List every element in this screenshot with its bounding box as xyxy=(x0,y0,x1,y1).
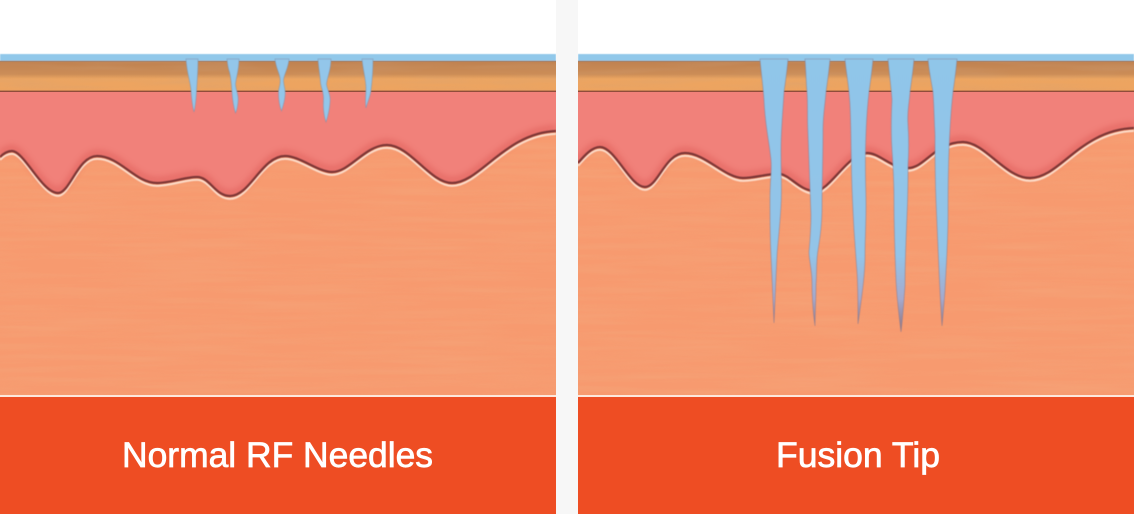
caption bar: Fusion Tip xyxy=(578,395,1134,514)
long needle channels xyxy=(760,59,957,332)
short needle channels xyxy=(186,59,373,122)
dermis layer with wavy boundary xyxy=(578,92,1134,194)
needle 2 xyxy=(805,59,830,326)
needle 3 xyxy=(275,59,289,111)
caption bar: Normal RF Needles xyxy=(0,395,556,514)
deep tissue layer xyxy=(578,128,1134,395)
needle 5 xyxy=(362,59,373,108)
panel: normal RF needles xyxy=(0,54,556,514)
deep tissue layer xyxy=(0,131,556,395)
caption bar: Fusion Tip: Fusion Tip xyxy=(776,436,940,475)
epidermis layer xyxy=(578,61,1134,92)
needle 4 xyxy=(888,59,914,332)
needle 1 xyxy=(186,59,198,112)
skin surface blue band xyxy=(0,54,556,62)
needle 2 xyxy=(227,59,239,113)
needle 5 xyxy=(928,59,957,326)
caption bar: Normal RF Needles: Normal RF Needles xyxy=(122,436,433,475)
needle 1 xyxy=(760,59,788,323)
skin surface blue band xyxy=(578,54,1134,62)
panel: fusion tip xyxy=(578,54,1134,514)
needle 3 xyxy=(845,59,873,324)
needle 4 xyxy=(318,59,331,122)
epidermis layer xyxy=(0,61,556,92)
dermis layer with wavy boundary xyxy=(0,92,556,199)
